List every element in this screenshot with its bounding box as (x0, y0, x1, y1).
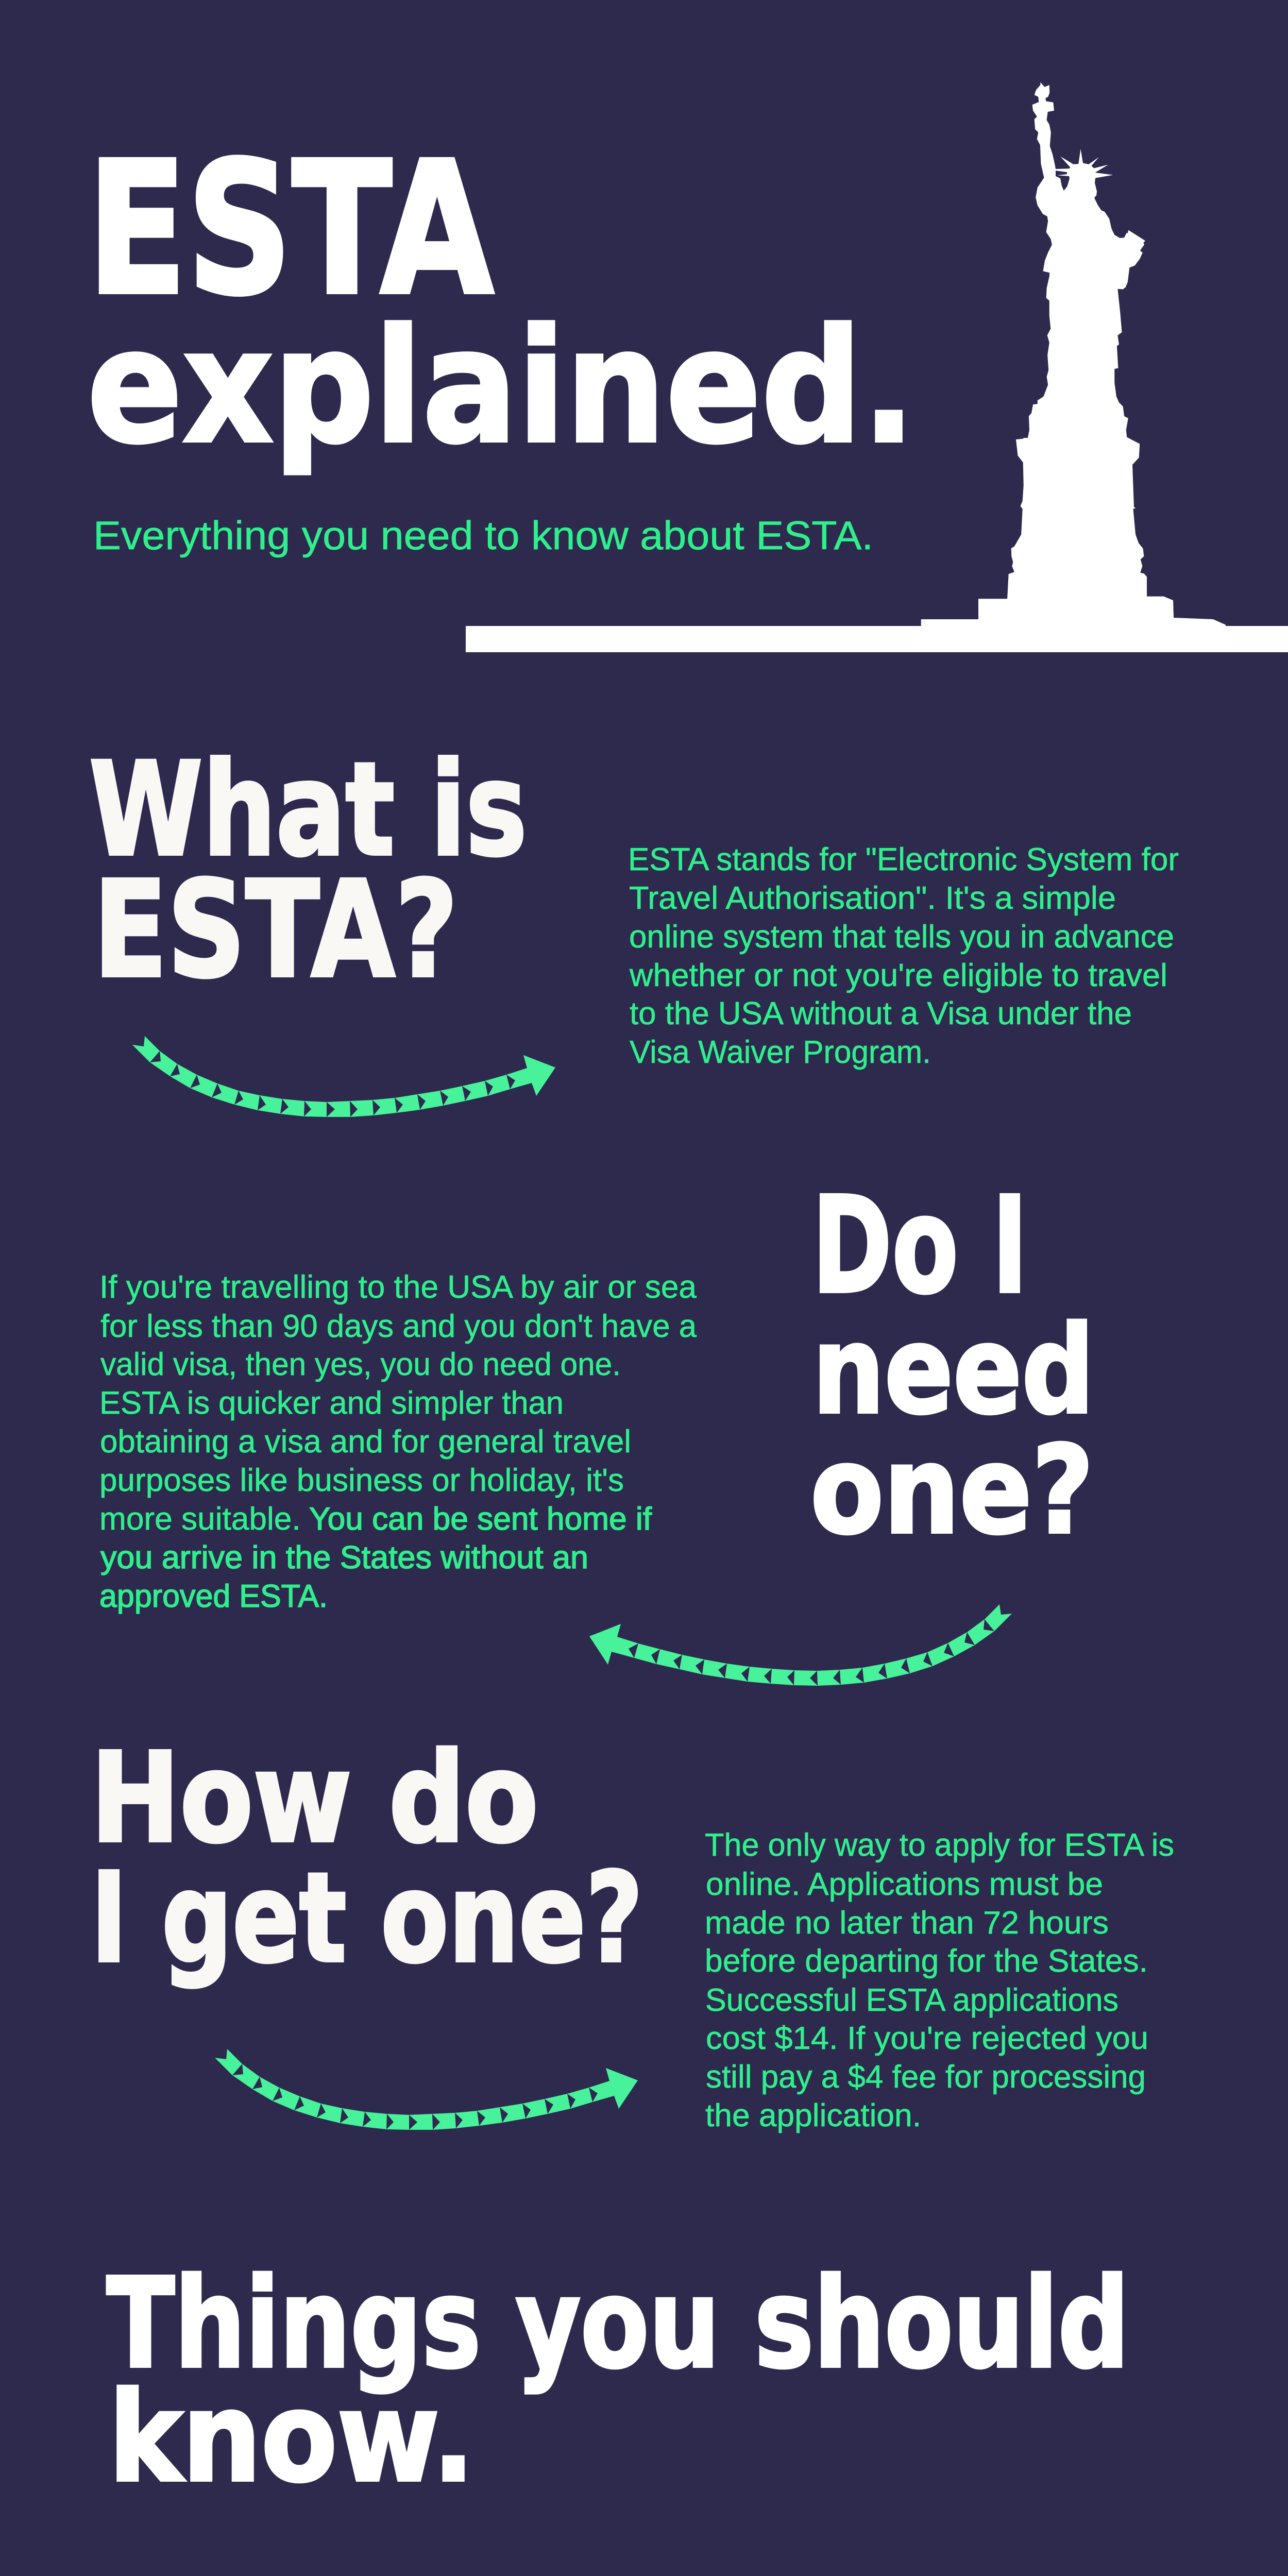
heading: What is ESTA? (89, 735, 527, 1007)
text block: do I need one: approved ESTA. (99, 1579, 328, 1614)
text block: do I need one: obtaining a visa and for general travel (100, 1424, 631, 1460)
text block: what is ESTA: ESTA stands for "Electronic System for (628, 842, 1179, 877)
text block: do I need one: you arrive in the States without an (100, 1540, 588, 1575)
text block: do I need one: for less than 90 days and you don't have a (100, 1309, 697, 1344)
heading: What is ESTA?: What is (89, 735, 527, 885)
arrow: what is ESTA, pointing right (132, 1036, 555, 1117)
title: ESTA (87, 123, 495, 335)
text block: do I need one (99, 1269, 697, 1614)
text block: how do I get one: Successful ESTA applications (705, 1982, 1118, 2018)
text block: how do I get one (705, 1827, 1174, 2133)
text block: what is ESTA: Visa Waiver Program. (630, 1035, 931, 1070)
text block: do I need one: valid visa, then yes, you do need one. (100, 1347, 621, 1382)
icon: statue of liberty silhouette on ground bar (466, 82, 1288, 652)
text block: how do I get one: made no later than 72 hours (705, 1905, 1109, 1941)
text block: what is ESTA: whether or not you're eligible to travel (629, 958, 1167, 993)
heading: Things you should know. (107, 2251, 1129, 2510)
heading: Do I need one?: need (812, 1300, 1094, 1441)
subtitle: Everything you need to know about ESTA. (93, 513, 873, 558)
text block: what is ESTA: Travel Authorisation". It's a simple (629, 880, 1116, 916)
text block: do I need one: ESTA is quicker and simpler than (99, 1385, 564, 1421)
heading: Do I need one?: Do I (812, 1168, 1028, 1323)
text block: how do I get one: The only way to apply for ESTA is (705, 1827, 1174, 1863)
heading: Do I need one? (810, 1168, 1094, 1561)
text block: how do I get one: still pay a $4 fee for processing (706, 2059, 1146, 2095)
text block: what is ESTA: to the USA without a Visa under the (630, 996, 1132, 1031)
text block: what is ESTA: online system that tells you in advance (629, 919, 1174, 955)
arrow: how do I get one, pointing right (215, 2049, 638, 2130)
heading: Do I need one?: one? (810, 1420, 1094, 1561)
heading: How do I get one? (91, 1726, 643, 1990)
text block: what is ESTA (628, 842, 1179, 1070)
text block: do I need one: more suitable. You can be sent home if (99, 1501, 652, 1537)
text block: do I need one: purposes like business or holiday, it's (99, 1463, 624, 1498)
text block: how do I get one: the application. (705, 2098, 921, 2133)
heading: How do I get one?: How do (91, 1726, 538, 1870)
heading: What is ESTA?: ESTA? (93, 853, 458, 1007)
text block: how do I get one: before departing for the States. (705, 1943, 1148, 1979)
text block: do I need one: If you're travelling to the USA by air or sea (99, 1269, 697, 1305)
arrow: do I need one, pointing left (589, 1604, 1012, 1686)
title: explained. (87, 295, 916, 478)
title (87, 123, 916, 478)
text block: how do I get one: cost $14. If you're rejected you (706, 2021, 1148, 2056)
text block: how do I get one: online. Applications must be (706, 1867, 1103, 1902)
heading: How do I get one?: I get one? (91, 1846, 643, 1990)
heading: Things you should know.: know. (109, 2365, 474, 2510)
